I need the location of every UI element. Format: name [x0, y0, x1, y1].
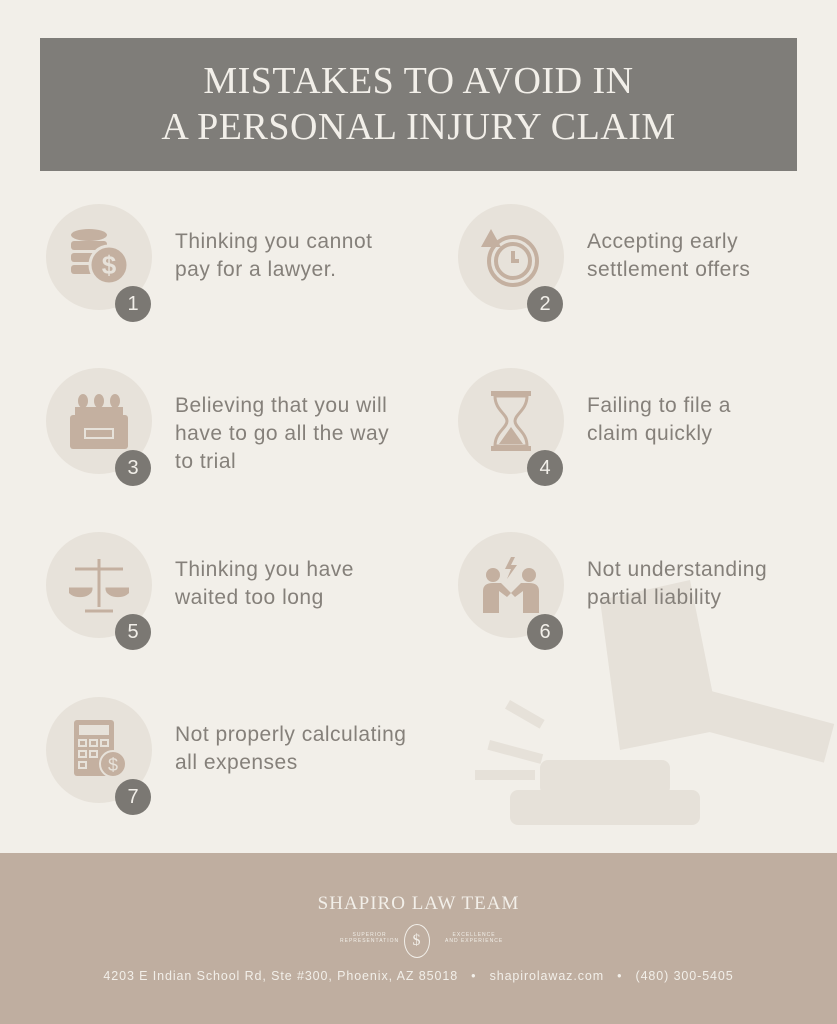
- item 2: 2: [539, 293, 551, 315]
- item 3: have to go all the way: [175, 422, 389, 445]
- item 1: 1: [127, 293, 139, 315]
- item 6: partial liability: [587, 586, 722, 609]
- icon: calculator: $: [108, 755, 118, 775]
- icon: conflict: [483, 557, 539, 613]
- title: A PERSONAL INJURY CLAIM: [161, 106, 676, 148]
- footer taglines: EXCELLENCE: [453, 932, 496, 938]
- icon: hourglass: [491, 391, 531, 451]
- footer taglines: $: [412, 932, 422, 949]
- item 3: [46, 368, 389, 486]
- footer contact: 4203 E Indian School Rd, Ste #300, Phoenix, AZ 85018 • shapirolawaz.com • (480) 300-5405: [103, 969, 734, 983]
- item 6: Not understanding: [587, 558, 767, 581]
- icon: scales: [69, 559, 129, 612]
- item 5: Thinking you have: [175, 558, 354, 581]
- item 2: [458, 204, 750, 322]
- item 5: [46, 532, 354, 650]
- icon: clock alert: [481, 229, 539, 287]
- item 4: claim quickly: [587, 422, 713, 445]
- item 1: [46, 204, 372, 322]
- item 2: Accepting early: [587, 230, 738, 253]
- item 3: Believing that you will: [175, 394, 387, 417]
- item 1: pay for a lawyer.: [175, 258, 336, 281]
- item 3: 3: [127, 457, 139, 479]
- item 2: settlement offers: [587, 258, 750, 281]
- item 6: 6: [539, 621, 551, 643]
- item 4: [458, 368, 731, 486]
- footer taglines: [340, 924, 503, 958]
- icon: calculator: [74, 720, 125, 776]
- item 3: to trial: [175, 450, 236, 473]
- footer brand: SHAPIRO LAW TEAM: [318, 893, 519, 914]
- gavel watermark: [475, 580, 834, 825]
- item 1: Thinking you cannot: [175, 230, 372, 253]
- item 7: 7: [127, 786, 139, 808]
- footer taglines: REPRESENTATION: [340, 938, 399, 944]
- item 4: Failing to file a: [587, 394, 731, 417]
- item 5: 5: [127, 621, 139, 643]
- title: MISTAKES TO AVOID IN: [203, 60, 634, 102]
- icon: coins: [71, 229, 126, 282]
- item 6: [458, 532, 767, 650]
- icon: coins: $: [102, 250, 117, 280]
- footer: [0, 853, 837, 1024]
- item 5: waited too long: [175, 586, 324, 609]
- item 7: [46, 697, 406, 815]
- title: [40, 38, 797, 171]
- item 7: Not properly calculating: [175, 723, 406, 746]
- footer taglines: AND EXPERIENCE: [445, 938, 503, 944]
- item 4: 4: [539, 457, 551, 479]
- footer taglines: SUPERIOR: [352, 932, 387, 938]
- item 7: all expenses: [175, 751, 298, 774]
- icon: jury: [70, 394, 128, 449]
